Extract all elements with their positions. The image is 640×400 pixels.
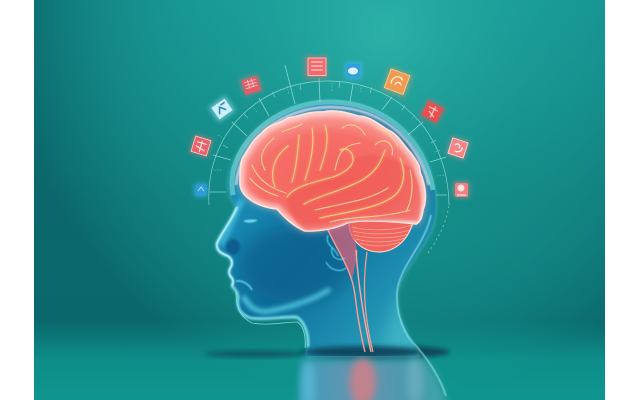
icon: cloud, blue [345,62,362,79]
back of neck outline [397,215,446,396]
brain rim highlight [240,111,425,231]
ring scale around the head [209,65,449,253]
floor shadow [205,345,450,359]
brain stem and spinal nerves [327,222,373,352]
icon: orange tile [381,66,413,98]
neck reflection on the floor [298,355,448,400]
icon: pink tile lower right [453,181,470,198]
icon: pink tile left [189,134,213,158]
cerebellum [349,218,414,252]
brain glow [240,111,425,231]
eye [243,219,258,223]
icon: document, top [305,56,327,78]
sulci core [250,124,412,222]
mouth [236,281,252,290]
icon: red tile right [419,98,447,126]
brain [240,111,425,231]
head silhouette [217,102,446,396]
face shading [220,200,425,358]
glowing face outline [217,207,308,347]
skull cap band [232,102,433,195]
icon: pink tile right [445,135,471,161]
sulci glow [273,125,404,218]
icon: blue tile left [194,183,208,197]
icon: red tile upper left [239,73,263,97]
ear lines [326,235,346,270]
icon: white-blue tile [209,96,235,122]
